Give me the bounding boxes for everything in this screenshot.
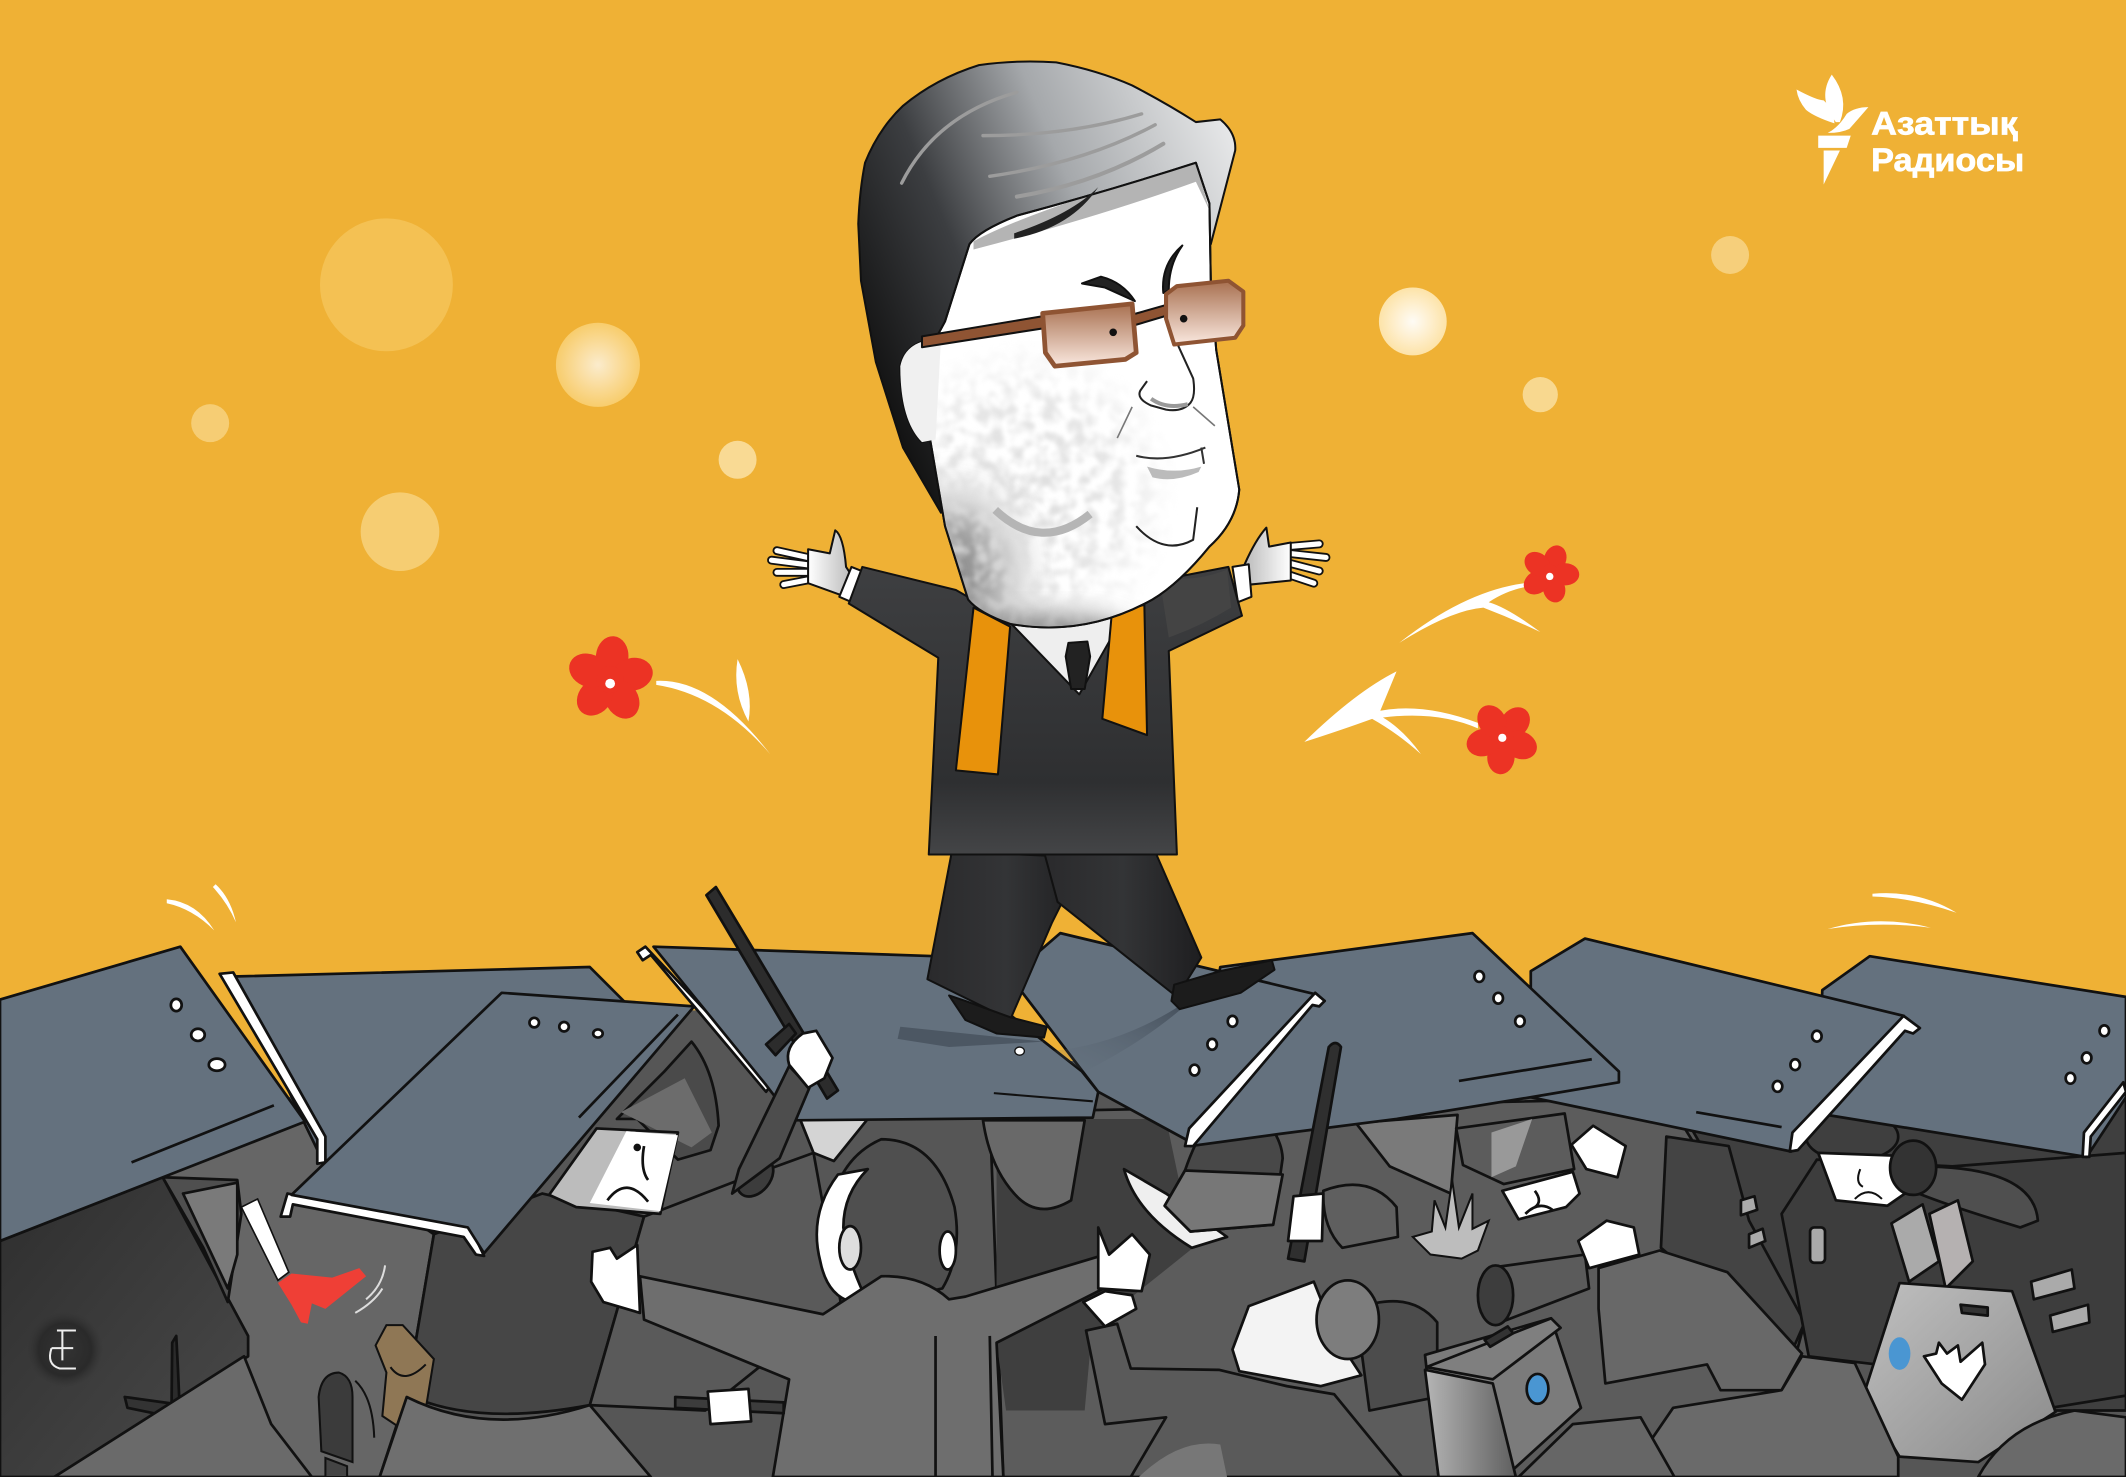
trousers [927,852,1201,1020]
figure: bald man with cap [1083,1280,1437,1477]
shield front left [281,993,694,1256]
eyebrows [1082,277,1135,301]
foot shadows [898,997,1193,1071]
icon: artist signature [27,1312,103,1387]
logo: Azattyq Radiosy: Азаттық [1871,105,2018,141]
shield back left [233,967,626,1180]
shoes [949,960,1275,1038]
ear [900,339,941,442]
foreground coats left [54,1356,651,1477]
centre dark coat [997,1119,1193,1411]
left shadow behind shields [122,1112,434,1477]
icon: ballot box right [1863,1283,2055,1462]
scarf [956,605,1147,774]
shield centre right [1010,933,1325,1146]
face [888,92,1243,656]
main figure: politician [771,61,1326,1038]
crowd base [0,1010,2126,1477]
flower left [564,635,770,754]
icon: radio [319,1373,374,1477]
hair [858,61,1235,513]
icon: red shoe [241,1199,385,1324]
jacket [849,567,1242,854]
shield H [1818,956,2126,1157]
left hand [771,530,865,605]
right dark crowd [1666,1085,2126,1411]
icon: ballot box left [1425,1318,1581,1477]
foreground coats right [1519,1356,2126,1477]
shirt [1009,613,1125,694]
shield centre left [637,947,1098,1120]
figure: soldier with helmet [407,1042,841,1414]
baton centre with fist [1288,1043,1341,1261]
motion marks [167,884,1957,930]
figure: soldier in fur hat [1456,1114,1805,1356]
flower upper right [1399,542,1580,643]
nose [1139,346,1194,410]
shield F [1190,933,1619,1146]
figure: officer with raised sleeve [1478,1196,1802,1390]
figure: central helmeted soldier [1124,1088,1458,1248]
hair strands [902,92,1163,197]
logo: Azattyq Radiosy [1797,75,2024,184]
shield G [1531,939,1920,1151]
bubbles [191,218,1749,571]
icon: holster [376,1325,434,1432]
figure: man seen from behind [591,1119,1150,1477]
figure: dark officer bottom left [0,1177,248,1477]
right hand [1232,528,1326,602]
chin crease [1136,507,1197,546]
figure: soldier with earmuff right [1782,1112,2126,1411]
mouth [1136,448,1205,464]
hair wisp [1014,187,1098,239]
icon: splayed grey hand [1413,1180,1489,1259]
raised arm with baton [706,887,838,1194]
shield far left [0,947,325,1241]
flower lower right [1304,671,1541,775]
logo: Azattyq Radiosy: Радиосы [1871,142,2024,178]
glasses [922,281,1243,366]
